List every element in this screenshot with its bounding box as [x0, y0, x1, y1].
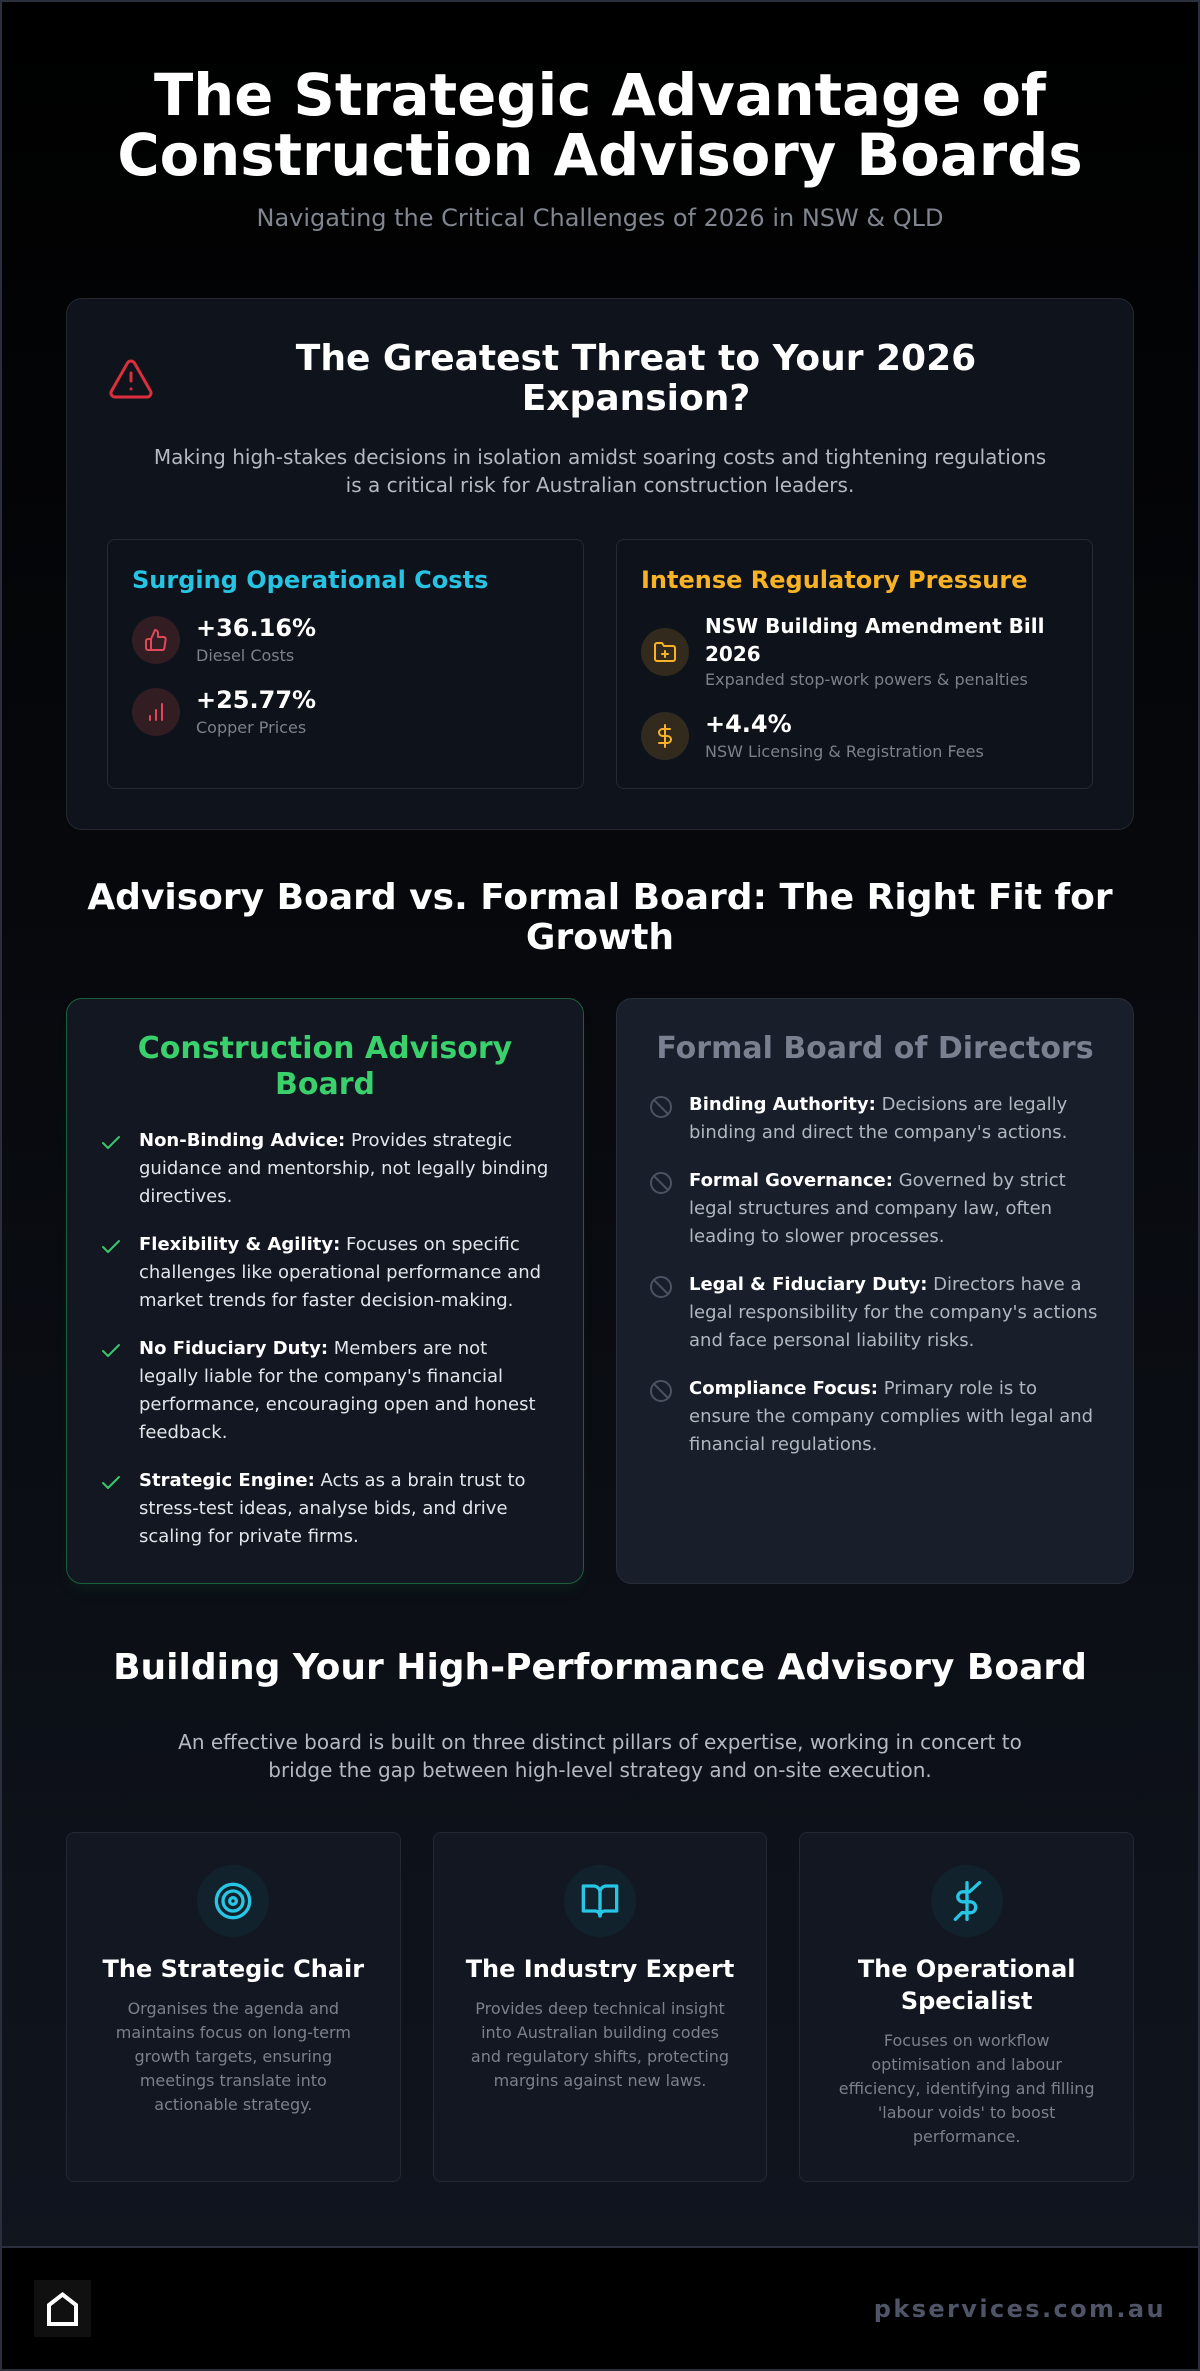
footer	[2, 2246, 1198, 2369]
heading: comparison: Advisory Board vs. Formal Board: The Right Fit for Growth	[87, 877, 1113, 958]
three pillars	[66, 1832, 1134, 2182]
heading: threat: The Greatest Threat to Your 2026 Expansion?	[296, 338, 976, 419]
diesel figures	[196, 614, 316, 665]
panel: greatest threat	[66, 298, 1134, 830]
point: legal duty: Legal & Fiduciary Duty: Directors have a legal responsibility for the company's actions and face personal liability risks.	[689, 1274, 1097, 1351]
panel: surging operational costs	[107, 539, 584, 789]
strategic chair description: Organises the agenda and maintains focus on long-term growth targets, ensuring meetings translate into actionable strategy.	[116, 1999, 351, 2114]
icon: open book	[564, 1865, 636, 1937]
icon: dollar	[641, 712, 689, 760]
panel: industry expert	[433, 1832, 767, 2182]
benefit: flexibility: Flexibility & Agility: Focuses on specific challenges like operational performance and market trends for faster decision-making.	[139, 1234, 541, 1311]
copper figures: +25.77%	[196, 686, 316, 714]
benefit: no fiduciary duty: No Fiduciary Duty: Members are not legally liable for the company's financial performance, encouraging open and honest feedback.	[139, 1338, 536, 1443]
fee figures	[705, 710, 984, 761]
heading: formal board: Formal Board of Directors	[656, 1031, 1094, 1066]
point: compliance focus: Compliance Focus: Primary role is to ensure the company complies with legal and financial regulations.	[689, 1378, 1093, 1455]
fee figures: +4.4%	[705, 710, 792, 738]
panel: construction advisory board	[66, 998, 584, 1584]
website: pkservices.com.au	[874, 2294, 1166, 2322]
heading: regulation: Intense Regulatory Pressure	[641, 566, 1027, 594]
copper figures	[196, 686, 316, 737]
operational specialist description: Focuses on workflow optimisation and labour efficiency, identifying and filling 'labour voids' to boost performance.	[839, 2031, 1095, 2146]
stat: amendment bill	[641, 614, 1044, 689]
header	[117, 62, 1083, 232]
threat description: Making high-stakes decisions in isolation amidst soaring costs and tightening regulations is a critical risk for Australian construction leaders.	[154, 445, 1046, 497]
bill details: NSW Building Amendment Bill 2026	[705, 614, 1044, 666]
icon: warning triangle	[109, 360, 152, 398]
stat: licensing fees	[641, 710, 984, 761]
copper figures: Copper Prices	[196, 718, 306, 737]
icon: target	[197, 1865, 269, 1937]
heading: operational specialist: The Operational Specialist	[858, 1955, 1076, 2015]
heading: strategic chair: The Strategic Chair	[103, 1955, 364, 1983]
panel: intense regulatory pressure	[616, 539, 1093, 789]
icon: bar chart	[132, 688, 180, 736]
title: The Strategic Advantage of	[154, 62, 1046, 129]
stat: diesel costs	[132, 614, 316, 665]
panel: strategic chair	[66, 1832, 401, 2182]
icon: dollar with arrows	[931, 1865, 1003, 1937]
title: Construction Advisory Boards	[117, 122, 1083, 189]
diesel figures: +36.16%	[196, 614, 316, 642]
title	[117, 62, 1083, 189]
panel: formal board of directors	[616, 998, 1134, 1584]
heading: costs: Surging Operational Costs	[132, 566, 488, 594]
point: binding authority: Binding Authority: Decisions are legally binding and direct the company's actions.	[689, 1094, 1067, 1143]
building description: An effective board is built on three distinct pillars of expertise, working in concert to bridge the gap between high-level strategy and on-site execution.	[178, 1730, 1022, 1782]
point: formal governance: Formal Governance: Governed by strict legal structures and company law, often leading to slower processes.	[689, 1170, 1066, 1247]
stat: copper prices	[132, 686, 316, 737]
comparison panels	[66, 998, 1134, 1584]
subtitle: Navigating the Critical Challenges of 2026 in NSW & QLD	[257, 204, 943, 232]
icon: thumbs up	[132, 616, 180, 664]
industry expert description: Provides deep technical insight into Australian building codes and regulatory shifts, protecting margins against new laws.	[471, 1999, 729, 2090]
icon: folder plus	[641, 628, 689, 676]
panel: operational specialist	[799, 1832, 1134, 2182]
benefit: non-binding advice: Non-Binding Advice: Provides strategic guidance and mentorship, not legally binding directives.	[139, 1130, 548, 1207]
benefit: strategic engine: Strategic Engine: Acts as a brain trust to stress-test ideas, analyse bids, and drive scaling for private firms.	[139, 1470, 526, 1547]
heading: advisory board: Construction Advisory Board	[138, 1031, 512, 1102]
threat sub-panels	[107, 539, 1093, 789]
logo	[34, 2280, 91, 2337]
heading: building the board: Building Your High-Performance Advisory Board	[113, 1647, 1087, 1688]
bill details: Expanded stop-work powers & penalties	[705, 670, 1028, 689]
diesel figures: Diesel Costs	[196, 646, 294, 665]
fee figures: NSW Licensing & Registration Fees	[705, 742, 984, 761]
heading: industry expert: The Industry Expert	[466, 1955, 734, 1983]
threat heading row	[109, 338, 976, 419]
bill details	[705, 614, 1044, 689]
